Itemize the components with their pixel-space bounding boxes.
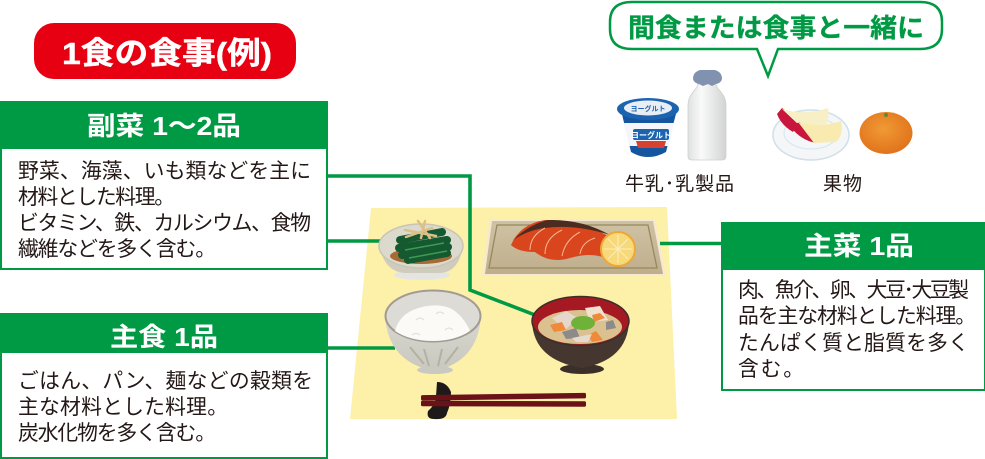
- icon: milk bottle: [688, 70, 726, 160]
- icon: salmon on tray: [482, 219, 666, 276]
- icon: yogurt: ヨーグルト: [631, 130, 671, 140]
- text: side dish description: 材料とした料理。: [18, 186, 175, 209]
- speech bubble: 間食または食事と一緒に: [628, 13, 924, 43]
- text: main dish description: 肉、魚介、卵、大豆･大豆製: [738, 279, 969, 302]
- text: staple description: 主な材料とした料理。: [18, 396, 228, 419]
- panel: side dish: [0, 102, 328, 269]
- title badge: 1食の食事(例): [62, 36, 272, 71]
- icon: rice bowl: [385, 290, 481, 374]
- text: staple description: ごはん、パン、麺などの穀類を: [18, 370, 313, 393]
- text: main dish description: たんぱく質と脂質を多く: [738, 332, 969, 355]
- icon: side dish bowl: [379, 221, 463, 280]
- heading: side dish: 副菜 1～2品: [87, 111, 241, 141]
- text: staple description: 炭水化物を多く含む。: [18, 422, 216, 445]
- text: side dish description: ビタミン、鉄、カルシウム、食物: [18, 212, 311, 235]
- icon: yogurt: [617, 98, 679, 157]
- text: side dish description: 繊維などを多く含む。: [18, 238, 216, 261]
- text: main dish description: 含む。: [738, 358, 804, 381]
- text: side dish description: 野菜、海藻、いも類などを主に: [18, 160, 311, 183]
- heading: side dish: [0, 102, 328, 149]
- text: main dish description: 品を主な材料とした料理。: [738, 305, 976, 328]
- heading: main dish: 主菜 1品: [804, 231, 914, 261]
- icon: chopsticks and rest: [421, 382, 586, 419]
- label: fruit: 果物: [823, 173, 862, 195]
- icon: apple on plate: [773, 108, 849, 160]
- speech bubble: [610, 2, 942, 76]
- heading: staple: 主食 1品: [110, 322, 218, 352]
- panel: staple: [0, 313, 328, 458]
- label: dairy: 牛乳･乳製品: [625, 173, 734, 195]
- icon: miso soup bowl: [532, 296, 629, 374]
- panel: main dish: [721, 222, 985, 390]
- heading: main dish: [721, 222, 985, 270]
- icon: mandarin orange: [860, 112, 912, 154]
- heading: staple: [0, 313, 328, 353]
- placemat: [350, 207, 677, 419]
- connector lines: [327, 176, 722, 348]
- title badge: [34, 23, 296, 79]
- icon: yogurt: ヨーグルト: [630, 104, 666, 113]
